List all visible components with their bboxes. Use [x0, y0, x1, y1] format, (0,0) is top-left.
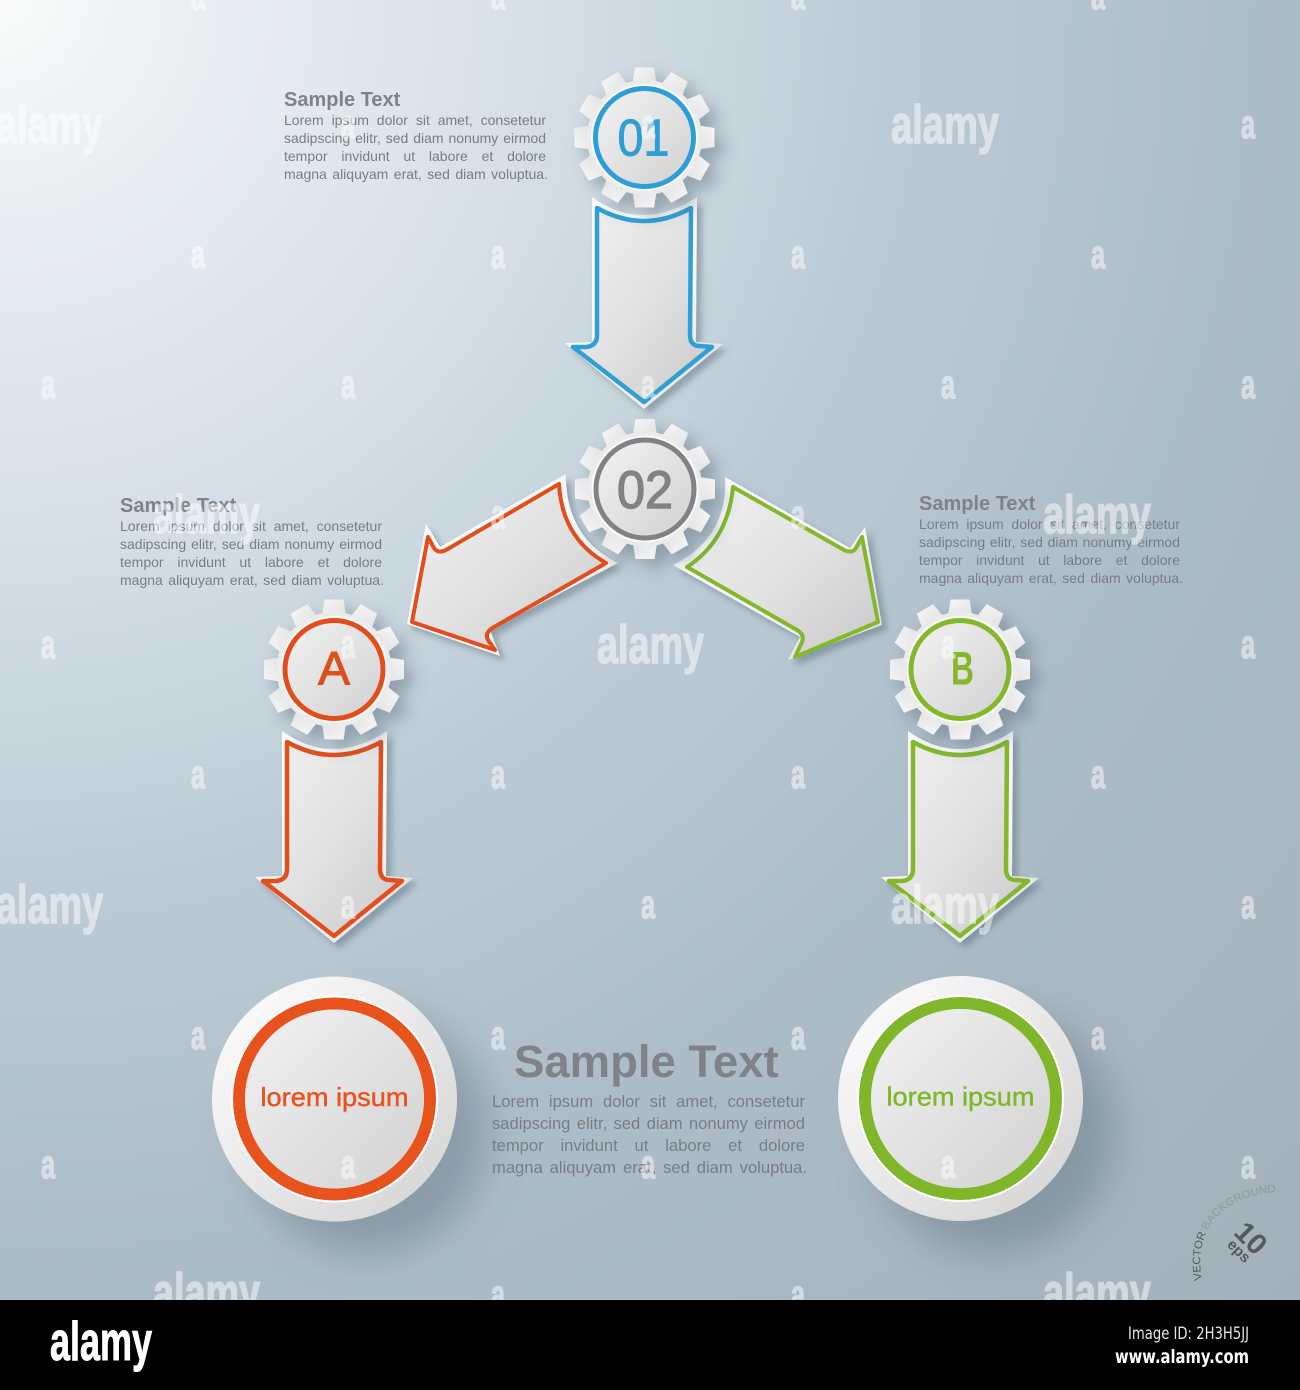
text block: top — [284, 89, 548, 182]
button: lorem ipsum orange — [212, 976, 457, 1222]
text block: left — [120, 495, 384, 588]
watermark overlay: a — [641, 363, 655, 407]
watermark overlay: a — [1241, 103, 1255, 147]
watermark overlay: a — [941, 363, 955, 407]
watermark overlay: a — [641, 883, 655, 927]
text block: top: Lorem ipsum dolor sit amet, consetetur — [284, 112, 546, 128]
text block: left: Lorem ipsum dolor sit amet, consetetur — [120, 518, 382, 534]
watermark overlay: a — [1241, 1143, 1255, 1187]
watermark overlay: a — [1241, 363, 1255, 407]
watermark overlay: a — [791, 233, 805, 277]
button: lorem ipsum green: lorem ipsum — [886, 1082, 1034, 1112]
text block: left: magna aliquyam erat, sed diam voluptua. — [120, 572, 384, 588]
watermark overlay: a — [1241, 623, 1255, 667]
watermark overlay: alamy — [153, 485, 260, 545]
watermark overlay: alamy — [0, 95, 103, 155]
arrow: 01 down (blue) — [565, 197, 723, 409]
gear: 01: 01 — [618, 110, 670, 168]
watermark overlay: a — [41, 1143, 55, 1187]
watermark overlay: a — [491, 493, 505, 537]
watermark overlay: a — [341, 363, 355, 407]
text block: top: sadipscing elitr, sed diam nonumy eirmod — [284, 130, 546, 146]
text block: bottom center: tempor invidunt ut labore et dolore — [492, 1136, 805, 1155]
arrow: from 02 to B (green) — [673, 477, 882, 660]
arrow: B down (green) — [881, 731, 1039, 943]
text block: right: Lorem ipsum dolor sit amet, consetetur — [919, 516, 1180, 532]
watermark overlay: a — [191, 233, 205, 277]
text block: left: sadipscing elitr, sed diam nonumy eirmod — [120, 536, 382, 552]
footer bar — [0, 1300, 1300, 1390]
watermark overlay: alamy — [597, 615, 704, 675]
text block: bottom center: magna aliquyam erat, sed diam voluptua. — [492, 1158, 807, 1177]
watermark overlay: a — [41, 363, 55, 407]
footer logo: alamy — [50, 1310, 152, 1372]
watermark overlay: a — [341, 1143, 355, 1187]
text block: right — [919, 493, 1183, 586]
gear: 02: 02 — [617, 461, 673, 520]
text block: top: magna aliquyam erat, sed diam voluptua. — [284, 166, 548, 182]
gear: 02 — [575, 419, 715, 559]
watermark overlay: a — [1091, 233, 1105, 277]
watermark overlay: a — [941, 1143, 955, 1187]
text block: right: sadipscing elitr, sed diam nonumy eirmod — [919, 534, 1180, 550]
vector background 10 eps badge: 10 — [1228, 1216, 1273, 1261]
text block: right: tempor invidunt ut labore et dolore — [919, 552, 1180, 568]
watermark overlay: a — [791, 493, 805, 537]
gear: 01 — [574, 68, 714, 208]
text block: left: Sample Text — [120, 495, 236, 517]
text block: bottom center: sadipscing elitr, sed diam nonumy eirmod — [492, 1114, 805, 1133]
watermark overlay: alamy — [891, 875, 999, 935]
watermark overlay: a — [941, 623, 955, 667]
watermark overlay: a — [41, 623, 55, 667]
gear: A: A — [318, 642, 351, 694]
watermark overlay: a — [191, 753, 205, 797]
vector background 10 eps badge: VECTOR BACKGROUND — [1192, 1185, 1275, 1281]
watermark overlay: alamy — [891, 95, 999, 155]
watermark overlay: alamy — [1043, 485, 1151, 545]
text block: left: tempor invidunt ut labore et dolore — [120, 554, 382, 570]
text block: right: Sample Text — [919, 493, 1035, 515]
gear: A — [264, 600, 404, 740]
watermark overlay: a — [641, 103, 655, 147]
watermark overlay: a — [791, 1014, 805, 1058]
website: www.alamy.com — [1115, 1346, 1249, 1368]
image id: Image ID: 2H3H5JJ — [1128, 1324, 1249, 1344]
watermark overlay: a — [491, 233, 505, 277]
watermark overlay: a — [341, 883, 355, 927]
text block: bottom center: Lorem ipsum dolor sit amet, consetetur — [492, 1092, 805, 1111]
watermark overlay: a — [1241, 883, 1255, 927]
text block: bottom center: Sample Text — [514, 1036, 779, 1087]
arrow: from 02 to A (orange) — [407, 474, 618, 656]
text block: top: Sample Text — [284, 89, 400, 111]
gear: B: B — [951, 642, 974, 694]
watermark overlay: a — [1091, 753, 1105, 797]
text block: bottom center — [492, 1036, 807, 1177]
watermark overlay: a — [641, 1143, 655, 1187]
text block: top: tempor invidunt ut labore et dolore — [284, 148, 546, 164]
watermark overlay: a — [1091, 1014, 1105, 1058]
watermark overlay: a — [491, 1014, 505, 1058]
watermark overlay: a — [341, 623, 355, 667]
button: lorem ipsum orange: lorem ipsum — [260, 1082, 408, 1112]
watermark overlay: a — [491, 753, 505, 797]
arrow: A down (orange) — [255, 731, 413, 943]
vector background 10 eps badge: eps — [1223, 1236, 1254, 1267]
watermark overlay: a — [791, 753, 805, 797]
watermark overlay: a — [341, 103, 355, 147]
gear: B — [890, 600, 1030, 740]
watermark overlay: a — [191, 1014, 205, 1058]
watermark overlay: alamy — [0, 875, 103, 935]
text block: right: magna aliquyam erat, sed diam voluptua. — [919, 570, 1183, 586]
button: lorem ipsum green — [838, 976, 1083, 1221]
